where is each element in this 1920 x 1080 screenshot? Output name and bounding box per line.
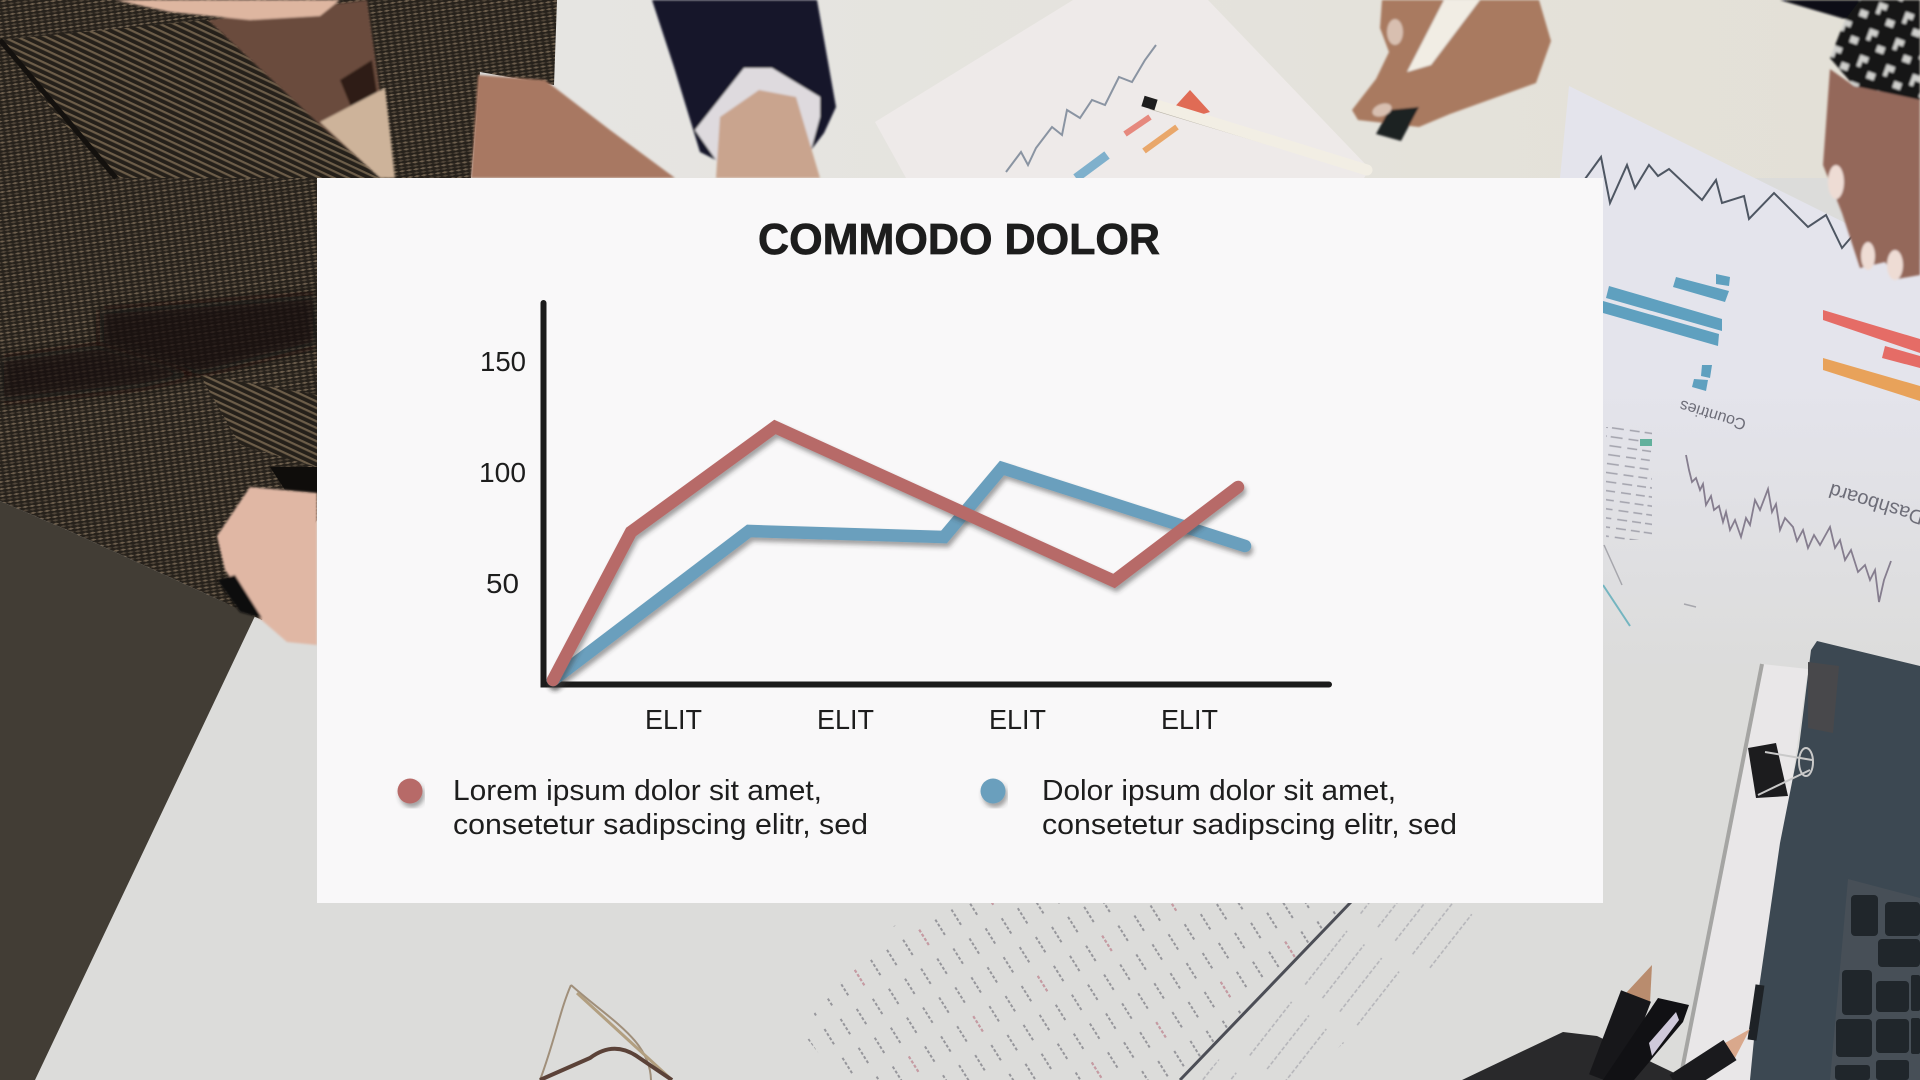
legend: blue series: Dolor ipsum dolor sit amet, [1042,775,1396,807]
chart axes [544,303,1329,684]
chest and neck [115,0,395,178]
panel: chart card [317,178,1603,903]
printed report with chart and pen [875,0,1370,178]
jacket: tweed upper body [0,0,557,620]
legend: red series: Lorem ipsum dolor sit amet, [453,775,822,807]
upside-down sheet labels: Countries [1678,396,1748,432]
x axis labels: ELIT [1161,704,1218,735]
y axis labels: 100 [479,457,526,488]
number sheet below the panel [800,902,1480,1080]
hands of the woman [217,75,675,645]
blue series line [553,468,1245,680]
x axis labels: ELIT [645,704,702,735]
line chart [479,303,1329,735]
y axis labels [479,346,526,599]
legend: blue series: consetetur sadipscing elitr, sed [1042,809,1457,841]
right hand with patterned sleeve [1780,0,1920,280]
y axis labels: 50 [486,568,519,599]
y axis labels: 150 [480,346,526,377]
carpet [0,501,255,1080]
hand holding marker [1352,0,1551,141]
navy sleeve and white cuff [652,0,836,178]
x axis labels [645,704,1218,735]
upside-down sheet labels [1678,396,1920,528]
red series line [553,427,1238,680]
glasses [540,985,672,1080]
dashboard sheet on the right [1560,86,1920,680]
pencil holder with pencils and scissors [1462,965,1750,1080]
legend: red series [398,775,868,841]
legend: red series: consetetur sadipscing elitr, sed [453,809,868,841]
laptop [1750,641,1920,1080]
clipboard edge [1680,664,1808,1080]
x axis labels: ELIT [989,704,1046,735]
legend: blue series [980,775,1457,841]
binder clip [1748,743,1813,798]
title: COMMODO DOLOR [758,215,1160,264]
x axis labels: ELIT [817,704,874,735]
